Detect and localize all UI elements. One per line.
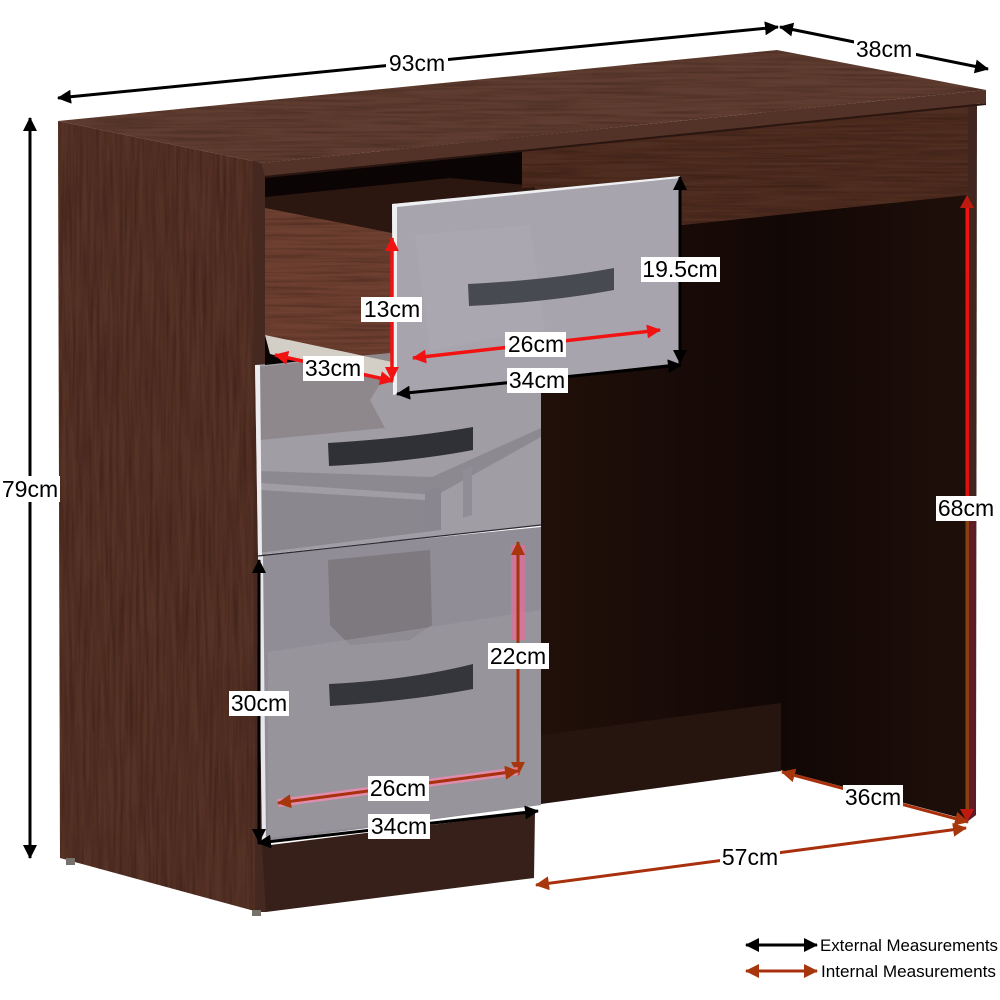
- desk inner right side: [778, 190, 968, 820]
- dimension: knee height 68cm: [936, 195, 996, 822]
- dimension: knee height 68cm: 68cm: [938, 495, 994, 521]
- middle drawer front: [255, 340, 541, 556]
- reflection: cushion: [415, 225, 545, 350]
- dimension: bottom drawer width 34cm: [258, 811, 538, 843]
- dimension: bottom drawer internal width 26cm: 26cm: [370, 775, 426, 801]
- dimension: drawer internal height 13cm: 13cm: [364, 296, 420, 322]
- dimension: bottom drawer height 30cm: [229, 560, 289, 842]
- drawer apron: [522, 98, 968, 240]
- reflection: basket: [258, 490, 425, 553]
- drawer back wall: [265, 178, 536, 250]
- dimension: bottom drawer internal height 22cm: 22cm: [490, 643, 546, 669]
- dimension: depth 38cm: [780, 27, 988, 69]
- reflection: wall: [258, 352, 400, 440]
- dimension: bottom drawer width 34cm: 34cm: [371, 813, 427, 839]
- feet: [66, 858, 261, 916]
- dimension: drawer depth 33cm: [275, 355, 393, 381]
- bottom drawer front: [258, 527, 541, 842]
- dimension: height 79cm: 79cm: [2, 476, 58, 502]
- legend: [746, 936, 998, 981]
- drawer cavity: [265, 145, 530, 360]
- dimension: overall width 93cm: [58, 27, 778, 98]
- reflection: table edge: [260, 428, 541, 495]
- desktop shadow line: [265, 103, 986, 178]
- dimension: overall width 93cm: 93cm: [389, 50, 445, 76]
- dimension: drawer depth 33cm: 33cm: [305, 355, 361, 381]
- left side panel: [58, 121, 262, 912]
- bottom drawer handle: [329, 664, 473, 706]
- middle drawer handle: [328, 427, 473, 466]
- dimension: bottom drawer internal height 22cm: [488, 542, 549, 775]
- dimension: drawer internal width 26cm: [413, 330, 660, 358]
- runner shadow: [265, 353, 302, 365]
- reflection: floor: [268, 610, 541, 838]
- dimension: drawer internal height 13cm: [361, 238, 422, 380]
- dimension: knee width 57cm: [536, 828, 966, 885]
- right panel edge: [967, 100, 977, 822]
- desk interior back panel: [541, 190, 790, 738]
- drawer seam: [258, 525, 541, 556]
- legend: internal measurements: Internal Measurements: [821, 962, 996, 981]
- reflection: bucket: [328, 550, 432, 645]
- dimension: bottom drawer internal width 26cm: [278, 771, 518, 803]
- dimension: knee width 57cm: 57cm: [722, 844, 778, 870]
- dimension: height 79cm: [0, 118, 60, 858]
- dimension: depth 38cm: 38cm: [856, 36, 912, 62]
- dimension: drawer internal width 26cm: 26cm: [508, 331, 564, 357]
- red tinted lower edge: [966, 510, 976, 822]
- dimension: bottom drawer height 30cm: 30cm: [231, 690, 287, 716]
- top drawer front: [392, 176, 680, 395]
- plinth: [262, 812, 535, 912]
- dimension: drawer height 19.5cm: [641, 177, 720, 363]
- drawer runner: [265, 335, 392, 382]
- dimension: drawer width 34cm: 34cm: [509, 367, 565, 393]
- reflection: table leg: [425, 488, 441, 532]
- drawer side wood: [265, 208, 392, 362]
- top drawer handle: [468, 268, 614, 306]
- desktop surface: [58, 50, 986, 163]
- dimension: knee depth 36cm: 36cm: [845, 784, 901, 810]
- legend: external measurements: External Measurements: [820, 936, 998, 955]
- dimension: drawer height 19.5cm: 19.5cm: [642, 256, 718, 282]
- desktop front edge: [261, 90, 986, 176]
- back plinth: [541, 703, 781, 804]
- left panel front edge: [253, 160, 266, 912]
- dimension: drawer width 34cm: [397, 365, 681, 394]
- dimension: knee depth 36cm: [782, 772, 968, 822]
